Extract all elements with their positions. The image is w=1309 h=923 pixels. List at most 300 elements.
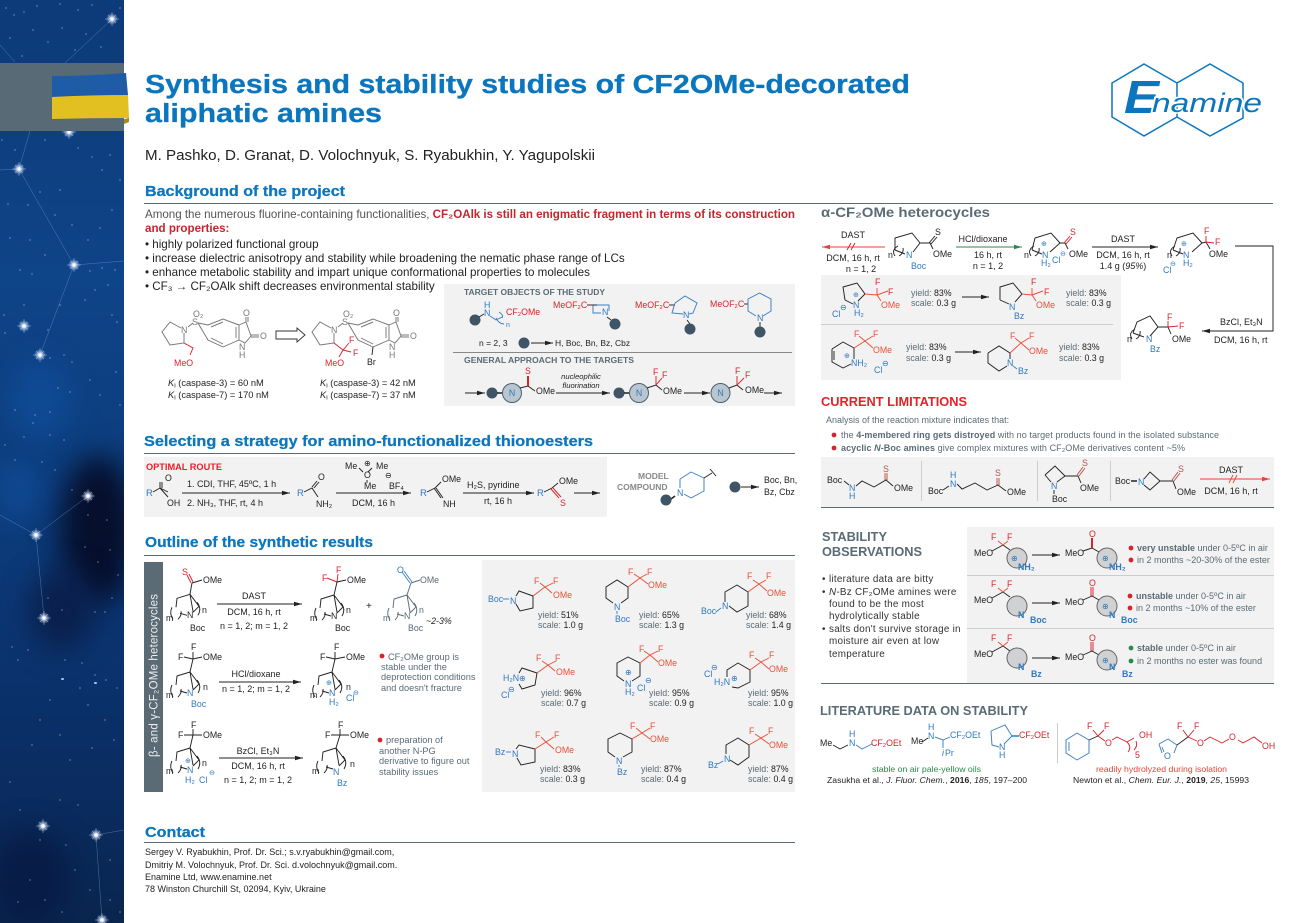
row: NH2 salt: MeO [974, 548, 993, 558]
substrate 4 [1115, 464, 1196, 497]
heading: outline: Outline of the synthetic results [145, 535, 373, 551]
molecule: fluorinated isatin: O [410, 331, 417, 341]
heading: contact: Contact [145, 825, 205, 841]
product: pyrrolidinium chloride: H₂N [503, 673, 519, 683]
substrate 2: H [950, 470, 956, 480]
reaction: benzoylation: N [187, 765, 193, 775]
logo: Enamine: namine [1152, 88, 1262, 118]
product: Bz piperidine 4: yield: 87% [748, 764, 789, 774]
row: N-Bz: N [1109, 662, 1115, 672]
row: N-Boc: N [1018, 610, 1024, 620]
reaction: DAST: Boc [408, 623, 424, 633]
reaction: benzoylation: H₂ [185, 775, 195, 785]
row: NH2 salt: MeO [1065, 548, 1084, 558]
product: piperidinium 3 chloride: F [658, 644, 664, 654]
product: N-Bz piperidine: Bz [1018, 366, 1028, 376]
row: N-Bz: O [1089, 633, 1096, 643]
product: piperidinium 4 chloride: ⊕ [731, 674, 738, 683]
reaction: DAST: ~2-3% [426, 616, 452, 626]
product: pyrrolidinium chloride: yield: 96% [541, 688, 582, 698]
Ki values: i [174, 382, 176, 390]
product: piperidinium: yield: 83% [906, 342, 947, 352]
route step 3: OMe [442, 474, 461, 484]
route step 4: OMe [559, 476, 578, 486]
product: N-Bz pyrrolidine: N [1009, 302, 1015, 312]
reaction: benzoylation: DCM, 16 h, rt [231, 761, 285, 771]
molecule: ammonium CF2OMe: OMe [1209, 249, 1228, 259]
product: pyrrolidinium chloride: F [555, 653, 561, 663]
molecule: fluorinated isatin: MeO [325, 358, 344, 368]
reaction: benzoylation: m [166, 766, 173, 776]
product: piperidinium 4 chloride: F [769, 650, 775, 660]
product: Boc piperidine 4: Boc [701, 606, 717, 616]
Ki values: (caspase-3) = 60 nM [176, 378, 264, 388]
section: alpha heterocycles [821, 204, 1273, 380]
literature molecule 3: CF₂OEt [1019, 730, 1050, 740]
arrow: HCl/dioxane [956, 234, 1022, 271]
title: aliphatic amines [145, 100, 382, 128]
literature molecule 1: H [849, 729, 855, 739]
stability bullets: N-Bz CF₂OMe amines were [829, 587, 957, 598]
reaction: DAST: OMe [420, 575, 439, 585]
reaction: DAST: OMe [203, 575, 222, 585]
heading: limitations: CURRENT LIMITATIONS [821, 394, 967, 409]
molecule: ammonium thionoester: S [1070, 227, 1076, 237]
reaction: benzoylation: N [333, 767, 339, 777]
route step 2: DCM, 16 h [352, 498, 395, 508]
product: piperidinium 3 chloride: scale: 0.9 g [649, 698, 694, 708]
literature molecule 2: Pr [945, 748, 954, 758]
row: N-Boc: MeO [1065, 597, 1084, 607]
product: Bz piperidine 4: F [768, 726, 774, 736]
substrate 2: Boc [928, 486, 944, 496]
substrate 2: N [950, 479, 956, 489]
literature molecule 2: N [928, 731, 934, 741]
substrate 3: S [1082, 458, 1088, 468]
reaction: deprotection: N [187, 688, 193, 698]
product: Bz piperidine 3: F [630, 721, 636, 731]
label: optimal route: OPTIMAL ROUTE [146, 462, 222, 472]
heading: background: Background of the project [145, 184, 345, 200]
route step 2: BF₄ [389, 481, 404, 491]
literature molecule 2: CF₂OEt [950, 730, 981, 740]
molecule: fluorinated isatin: F [349, 335, 355, 345]
arrow: HCl/dioxane: HCl/dioxane [958, 234, 1008, 244]
literature molecule 2: H [928, 722, 934, 732]
general approach scheme [465, 366, 782, 402]
note: deprotection [380, 652, 476, 693]
row: NH2 salt: F [991, 532, 997, 542]
literature molecule 2 [911, 722, 981, 758]
arrow: outline [276, 328, 305, 342]
molecule: N-Bz CF2OMe [1127, 312, 1191, 354]
route step 3: rt, 16 h [484, 496, 512, 506]
row: N-Bz: F [991, 633, 997, 643]
molecule: N-Boc thionoester: OMe [933, 249, 952, 259]
molecule: isatin inhibitor: H [239, 350, 245, 360]
molecule: fluorinated isatin: F [353, 348, 359, 358]
product: Bz pyrrolidine: F [535, 730, 541, 740]
literature captions: Newton et al., Chem. Eur. J., 2019, 25, 15993 [1073, 775, 1249, 785]
route step 2: R [297, 488, 304, 499]
product: Bz piperidine 3 [608, 721, 686, 784]
molecule: N-Boc thionoester: Boc [911, 261, 927, 271]
protecting group legend [730, 475, 797, 497]
literature molecule 5: F [1194, 721, 1200, 731]
background text: • CF₃ → CF₂OAlk shift decreases environmental stability [145, 280, 435, 293]
substrate 1: S [883, 464, 889, 474]
side label [144, 562, 163, 792]
substrate 3: OMe [1080, 483, 1099, 493]
product: piperidinium 4 chloride: H₂N [714, 677, 730, 687]
product: N-Bz pyrrolidine: F [1031, 277, 1037, 287]
literature molecule 5: OH [1262, 741, 1275, 751]
reaction: DAST: m [383, 613, 390, 623]
molecule: isatin inhibitor: MeO [174, 358, 193, 368]
product: Boc piperidine 4: scale: 1.4 g [746, 620, 791, 630]
product: Boc piperidine 4 [701, 571, 791, 630]
stability bullets: literature data are bitty [829, 574, 934, 585]
molecule: ammonium CF2OMe: H₂ [1183, 258, 1193, 268]
product: piperidinium 3 chloride: yield: 95% [649, 688, 690, 698]
reaction: deprotection: F [178, 652, 184, 662]
route step 4: S [560, 498, 566, 508]
product: Boc piperidine 4: F [766, 571, 772, 581]
reaction: deprotection: Cl [346, 693, 354, 703]
row: N-Boc: Boc [1121, 615, 1138, 625]
reaction: DAST: N [331, 611, 337, 621]
product: pyrrolidinium chloride: ⊕ [519, 674, 526, 683]
product: Bz pyrrolidine: scale: 0.3 g [540, 774, 585, 784]
molecule: ammonium thionoester: N [1042, 250, 1048, 260]
reaction: DAST: F [322, 573, 328, 583]
reaction: deprotection: ⊖ [353, 690, 359, 697]
literature molecule 3: N [999, 742, 1005, 752]
product: piperidinium 3 chloride: OMe [658, 658, 677, 668]
note: deprotection: stable under the [381, 662, 447, 672]
molecule: N-Bz CF2OMe: OMe [1172, 334, 1191, 344]
row: N-Bz: N [1018, 662, 1024, 672]
molecule: N-Boc thionoester [888, 227, 952, 271]
row: NH2 salt: very unstable under 0-5ºC in air [1137, 543, 1268, 553]
literature molecule 2: i [942, 748, 945, 758]
reaction: benzoylation: n [350, 759, 355, 769]
arrow: connector to benzoylation: DCM, 16 h, rt [1214, 335, 1268, 345]
Ki values: K [320, 390, 327, 400]
heading: literature: LITERATURE DATA ON STABILITY [820, 703, 1028, 718]
literature molecule 1: Me [820, 738, 832, 748]
route step 2: ⊖ [385, 471, 392, 480]
product: Bz piperidine 3: Bz [617, 767, 627, 777]
general approach scheme: OMe [663, 386, 682, 396]
note: deprotection: CF₂OMe group is [388, 652, 459, 662]
route step 2: O [318, 472, 325, 482]
route step 1: O [165, 473, 172, 483]
row: N-Bz: in 2 months no ester was found [1137, 656, 1262, 666]
product: N-Bz piperidine: yield: 83% [1059, 342, 1100, 352]
background text [145, 208, 795, 293]
reaction: DAST: n [202, 605, 207, 615]
arrow: DAST: DAST [1111, 234, 1135, 244]
arrow: connector to benzoylation [1202, 246, 1273, 345]
substituent legend: H, Boc, Bn, Bz, Cbz [555, 338, 630, 348]
product: piperidinium: NH₂ [851, 358, 867, 368]
scheme: failed DAST [822, 230, 885, 274]
product: Bz pyrrolidine: F [554, 730, 560, 740]
substrate 4: S [1178, 464, 1184, 474]
route step 2: ⊕ [364, 459, 371, 468]
substrate 1: Boc [827, 475, 843, 485]
molecule: ammonium CF2OMe: ⊖ [1170, 261, 1176, 268]
literature molecule 2: Me [911, 736, 923, 746]
panel: optimal route [144, 457, 607, 517]
heading: general approach: GENERAL APPROACH TO THE TARGETS [464, 356, 635, 365]
target: piperidine: N [757, 313, 763, 323]
target: azetidine: MeOF₂C [553, 300, 588, 310]
background text: and properties: [145, 222, 229, 235]
product: Boc piperidine 3: F [647, 567, 653, 577]
molecule: ammonium thionoester: ⊖ [1060, 251, 1066, 258]
panel: alpha products [821, 275, 1121, 380]
reaction: DAST: DAST [242, 591, 266, 601]
product: Bz pyrrolidine: N [512, 749, 518, 759]
substrate 3: N [1051, 481, 1057, 491]
reaction: DAST: n [346, 605, 351, 615]
scheme: failed DAST: n = 1, 2 [846, 264, 876, 274]
product: pyrrolidinium chloride: Cl [501, 690, 509, 700]
general approach scheme: N [636, 388, 642, 398]
stability bullets [822, 574, 961, 660]
literature captions: stable on air pale-yellow oils [872, 764, 981, 774]
reaction: deprotection: F [320, 652, 326, 662]
Ki values: (caspase-7) = 37 nM [328, 390, 416, 400]
row: NH2 salt: ⊕ [1011, 554, 1018, 563]
product: pyrrolidinium chloride: scale: 0.7 g [541, 698, 586, 708]
product: Bz piperidine 3: N [616, 756, 622, 766]
product: piperidinium 3 chloride: ⊖ [645, 676, 652, 685]
literature captions [827, 764, 1249, 785]
route step 2 [297, 459, 411, 509]
literature molecule 4 [1066, 721, 1152, 760]
product: piperidinium: Cl [874, 365, 882, 375]
reaction: DAST: DCM, 16 h, rt [227, 607, 281, 617]
Ki values: i [326, 394, 328, 402]
arrow: failed DAST: DAST [1219, 465, 1243, 475]
Ki values: K [320, 378, 327, 388]
stability bullets: • [822, 574, 826, 585]
substrate 1 [827, 464, 913, 501]
product: pyrrolidinium: yield: 83% [911, 288, 952, 298]
literature molecule 1: N [849, 738, 855, 748]
Ki values: K [168, 378, 175, 388]
contact details: Sergey V. Ryabukhin, Prof. Dr. Sci.; s.v.ryabukhin@gmail.com, [145, 847, 394, 857]
side label: β- and γ-CF₂OMe heterocycles [148, 594, 160, 757]
target: linear: CF₂OMe [506, 307, 540, 317]
reaction: DAST [166, 565, 452, 633]
substrate 2 [928, 468, 1026, 497]
target: linear: N [484, 308, 490, 318]
product: N-Bz pyrrolidine: yield: 83% [1066, 288, 1107, 298]
general approach scheme: nucleophilic [561, 372, 601, 381]
product: piperidinium 4 chloride: Cl [704, 669, 712, 679]
stability bullets: found to be the most [829, 599, 924, 610]
product: N-Bz pyrrolidine: F [1044, 287, 1050, 297]
product: Boc pyrrolidine: yield: 51% [538, 610, 579, 620]
reaction: benzoylation: m [312, 766, 319, 776]
molecule: ammonium thionoester: Cl [1052, 255, 1060, 265]
molecule: ammonium thionoester: n [1024, 250, 1029, 260]
molecule: isatin inhibitor: N [239, 342, 245, 352]
reaction: DAST: O [397, 565, 404, 575]
reaction: DAST: Boc [335, 623, 351, 633]
literature molecule 1 [820, 729, 902, 749]
scheme: failed DAST: DCM, 16 h, rt [826, 253, 880, 263]
row: NH2 salt: ⊕ [1102, 554, 1109, 563]
stability bullets: hydrolytically stable [829, 611, 920, 622]
product: Bz piperidine 4: Bz [708, 760, 718, 770]
product: piperidinium 3 chloride: F [639, 644, 645, 654]
route step 1: 1. CDI, THF, 45ºC, 1 h [187, 479, 276, 489]
product: Boc pyrrolidine: Boc [488, 594, 504, 604]
substrate 3 [1045, 458, 1099, 504]
molecule: N-Bz CF2OMe: n [1127, 334, 1132, 344]
reaction: benzoylation: F [338, 720, 344, 730]
section: current limitations [821, 394, 1274, 508]
row: N-Bz [974, 633, 1262, 679]
reaction: benzoylation [166, 720, 369, 788]
heading: alpha heterocycles: α-CF₂OMe heterocycles [821, 204, 990, 220]
product: N-Bz piperidine: N [1007, 358, 1013, 368]
row: N-Bz: Bz [1031, 669, 1042, 679]
reaction: DAST: OMe [347, 575, 366, 585]
molecule: N-Bz CF2OMe: F [1179, 321, 1185, 331]
substrate 2: S [995, 468, 1001, 478]
stability bullets: moisture air even at low [829, 636, 940, 647]
Ki values: i [326, 382, 328, 390]
row: N-Bz: ⊕ [1102, 656, 1109, 665]
reaction: benzoylation: F [178, 730, 184, 740]
product: Boc pyrrolidine: F [553, 576, 559, 586]
substrate 3: Boc [1052, 494, 1068, 504]
product: pyrrolidinium chloride [501, 653, 586, 708]
literature molecule 5: O [1197, 738, 1204, 748]
route step 2: Me [345, 461, 357, 471]
heading: strategy: Selecting a strategy for amino-functionalized thionoesters [144, 434, 593, 450]
reaction: deprotection: F [334, 642, 340, 652]
section: contact [144, 825, 795, 894]
substrate 2: OMe [1007, 487, 1026, 497]
product: Bz piperidine 4 [708, 726, 793, 784]
logo: Enamine: E [1124, 71, 1160, 123]
arrow: DAST [1092, 234, 1158, 271]
contact details: 78 Winston Churchill St, 02094, Kyiv, Ukraine [145, 884, 326, 894]
arrow: HCl/dioxane: 16 h, rt [974, 250, 1003, 260]
molecule: fluorinated isatin: H [389, 350, 395, 360]
general approach scheme: S [525, 366, 531, 376]
general approach scheme: F [662, 370, 668, 380]
row: N-Bz: stable under 0-5ºC in air [1137, 643, 1236, 653]
route step 3: H₂S, pyridine [467, 480, 520, 490]
row: N-Boc: Boc [1030, 615, 1047, 625]
general approach scheme: fluorination [562, 381, 600, 390]
row: NH2 salt: O [1089, 529, 1096, 539]
limitations text [826, 415, 1219, 453]
row: NH2 salt: in 2 months ~20-30% of the ester [1137, 555, 1270, 565]
literature molecule 4: 5 [1135, 750, 1140, 760]
background text: • enhance metabolic stability and impart unique conformational properties to molecules [145, 266, 590, 279]
product: N-Bz pyrrolidine [1000, 277, 1111, 321]
reaction: DAST: Boc [190, 623, 206, 633]
literature molecule 4: F [1104, 721, 1110, 731]
row: N-Boc: O [1089, 578, 1096, 588]
model compound: N [677, 488, 683, 498]
panel: product scope [482, 560, 795, 792]
target: pyrrolidine: N [683, 310, 689, 320]
heading: stability [822, 530, 922, 559]
substituent legend [479, 338, 630, 348]
substituent legend: n = 2, 3 [479, 338, 508, 348]
product: pyrrolidinium [832, 277, 956, 319]
molecule: ammonium thionoester: H₂ [1041, 258, 1051, 268]
molecule: N-Boc thionoester: S [935, 227, 941, 237]
arrow: DAST: DCM, 16 h, rt [1096, 250, 1150, 260]
note: benzoylation [378, 735, 470, 777]
reaction: benzoylation: ⊖ [209, 770, 215, 777]
starry sidebar [0, 0, 136, 923]
route step 2: NH₂ [316, 499, 332, 509]
Ki values: K [168, 390, 175, 400]
molecule: fluorinated isatin: N [331, 325, 337, 335]
row: N-Bz: MeO [974, 649, 993, 659]
product: Bz piperidine 4: F [749, 726, 755, 736]
arrow: DAST: 1.4 g (95%) [1100, 261, 1146, 271]
reaction: benzoylation: F [191, 720, 197, 730]
reaction: deprotection: OMe [346, 652, 365, 662]
banner with Ukrainian flag [0, 63, 129, 131]
product: pyrrolidinium chloride: F [536, 653, 542, 663]
route step 1: 2. NH₃, THF, rt, 4 h [187, 498, 263, 508]
reaction: deprotection: n = 1, 2; m = 1, 2 [222, 684, 290, 694]
product: piperidinium 4 chloride: OMe [769, 664, 788, 674]
section: literature data [820, 703, 1275, 785]
product: Boc piperidine 4: F [747, 571, 753, 581]
route step 3: NH [443, 499, 456, 509]
general approach scheme: OMe [536, 386, 555, 396]
product: Bz piperidine 3: OMe [650, 734, 669, 744]
reaction: deprotection: m [310, 690, 317, 700]
molecule: fluorinated isatin [312, 308, 417, 368]
molecule: fluorinated isatin: S [342, 317, 348, 327]
molecule: N-Boc thionoester: n [888, 250, 893, 260]
note: benzoylation: stability issues [379, 767, 439, 777]
molecule: N-Bz CF2OMe: F [1167, 312, 1173, 322]
protecting group legend: Boc, Bn, [764, 475, 797, 485]
molecule: fluorinated isatin: O [393, 308, 400, 318]
target: pyrrolidine [635, 296, 697, 334]
stability bullets: • [822, 624, 826, 635]
product: Bz piperidine 3: scale: 0.4 g [641, 774, 686, 784]
product: N-Bz piperidine [988, 331, 1104, 376]
molecule: ammonium thionoester [1024, 227, 1088, 268]
literature molecule 5 [1159, 721, 1275, 761]
product: Boc pyrrolidine: scale: 1.0 g [538, 620, 583, 630]
product: N-Bz pyrrolidine: OMe [1036, 300, 1055, 310]
product: Boc piperidine 3: N [614, 602, 620, 612]
arrow: HCl/dioxane: n = 1, 2 [973, 261, 1003, 271]
limitations text: acyclic N-Boc amines give complex mixtures with CF₂OMe derivatives content ~5% [841, 443, 1185, 453]
product: piperidinium 4 chloride: F [749, 650, 755, 660]
route step 1: R [146, 488, 153, 499]
